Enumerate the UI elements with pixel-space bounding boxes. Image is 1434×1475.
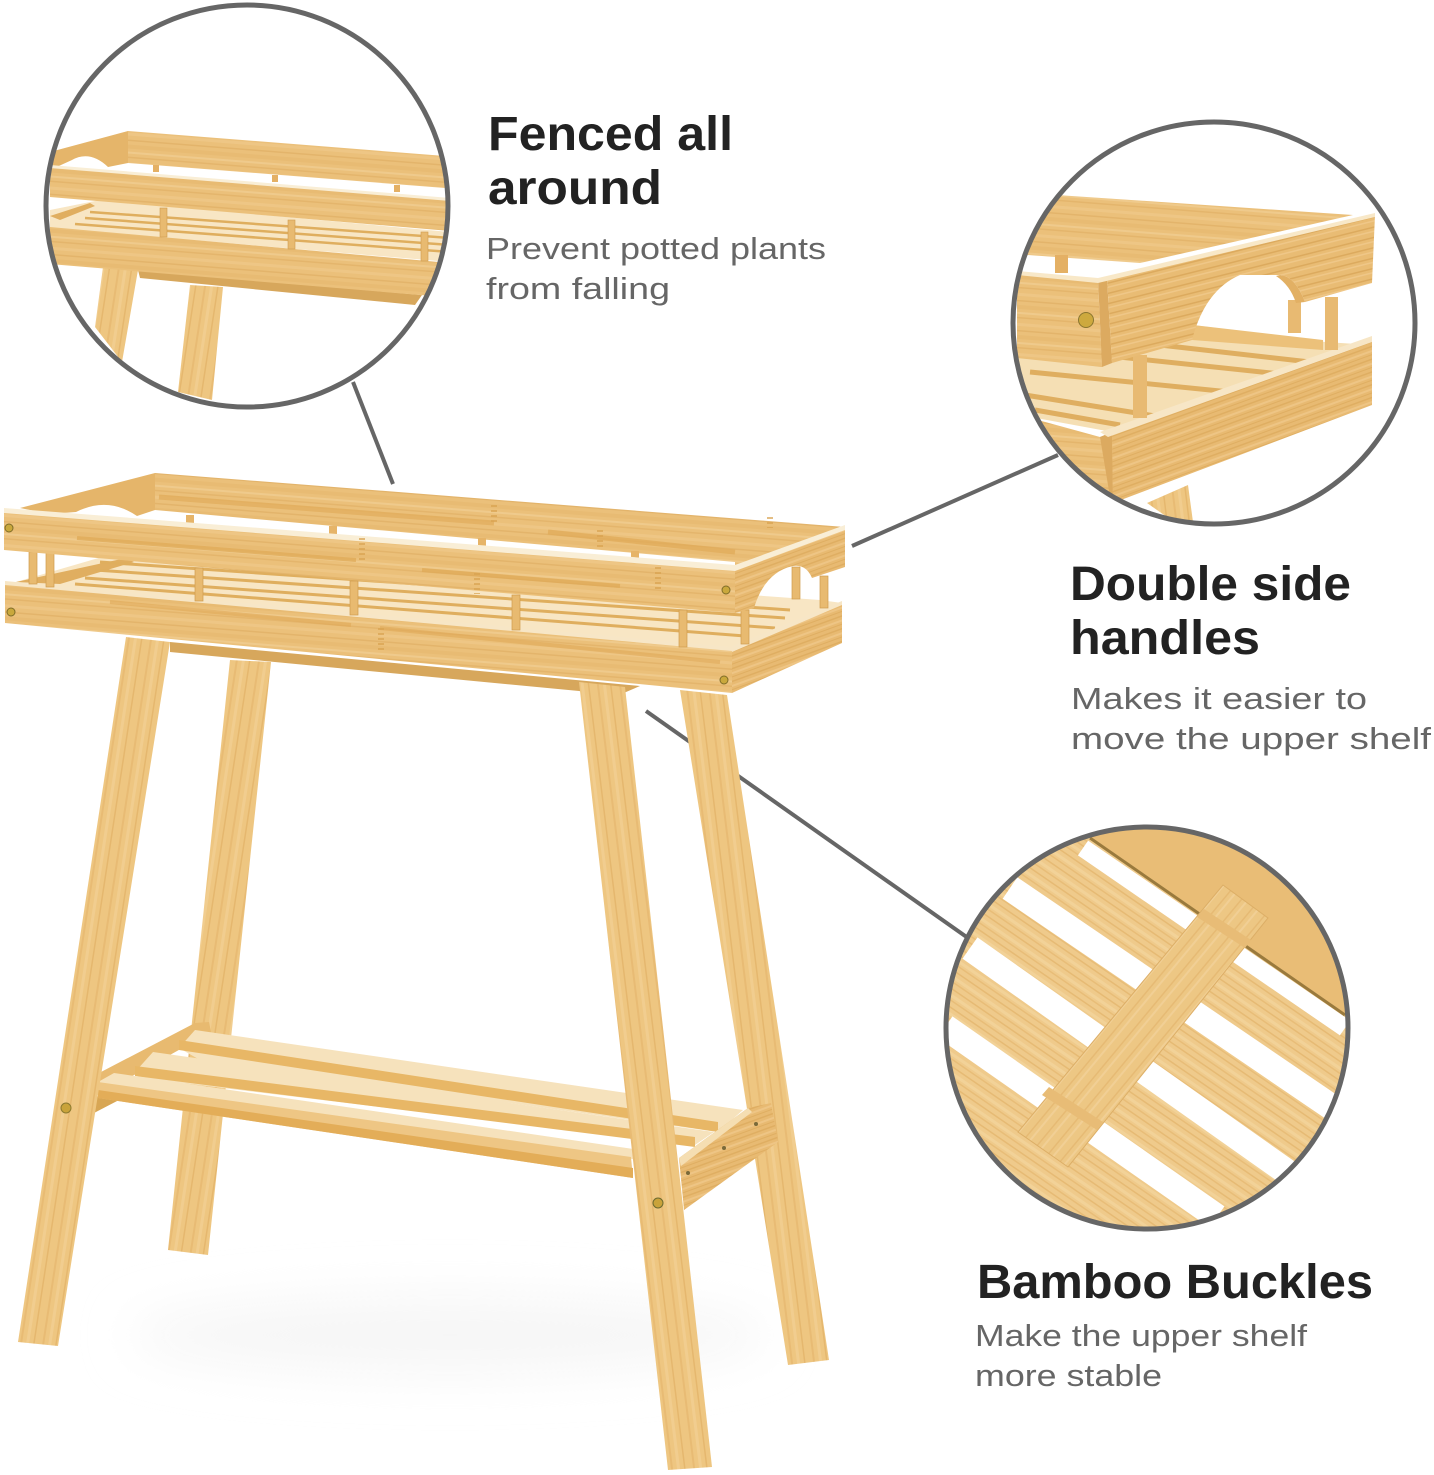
tray upper side rail with handle cut-out	[735, 527, 845, 613]
buckle board	[1018, 885, 1268, 1167]
description: prevent falling: from falling	[486, 271, 670, 306]
detail circle: fenced rail	[46, 5, 450, 407]
tray lower side rail	[732, 603, 842, 693]
detail circle: bamboo buckles	[945, 810, 1360, 1229]
heading line 2: around	[488, 162, 662, 215]
tray lower front rail	[5, 583, 732, 693]
back dowels	[186, 515, 639, 561]
back legs	[168, 660, 829, 1365]
heading: Bamboo Buckles: Bamboo Buckles	[977, 1256, 1373, 1309]
connector line: handle detail	[852, 455, 1058, 546]
heading: Fenced all around: Fenced all	[488, 108, 733, 161]
front dowels	[29, 552, 828, 647]
description: prevent falling	[486, 231, 826, 306]
lower rail streak	[110, 602, 720, 662]
under-tray support bar	[170, 642, 640, 698]
back rail streaks	[159, 497, 735, 552]
tray upper front rail	[4, 510, 735, 613]
description: more stable	[975, 1318, 1307, 1393]
heading line 2: handles	[1070, 612, 1260, 665]
floor shadow	[130, 1297, 770, 1373]
brass screws	[5, 524, 730, 684]
bamboo node marks	[362, 505, 770, 652]
description: more stable: more stable	[975, 1358, 1162, 1393]
front legs	[18, 637, 712, 1470]
detail circle: double side handles	[1010, 122, 1415, 524]
description: easier to move	[1071, 681, 1431, 756]
description: prevent falling: Prevent potted plants	[486, 231, 826, 266]
description: easier to move: Makes it easier to	[1071, 681, 1367, 716]
tray back rail	[155, 473, 845, 568]
lower shelf	[94, 1022, 778, 1210]
tray slatted floor	[5, 550, 842, 650]
white gaps between slats	[945, 848, 1345, 1217]
upper rail streaks	[77, 538, 620, 586]
description: easier to move: move the upper shelf	[1071, 721, 1431, 756]
description: more stable: Make the upper shelf	[975, 1318, 1307, 1353]
heading: Double side handles: Double side	[1070, 558, 1351, 611]
tray left rail	[20, 473, 155, 516]
product: bamboo plant stand	[4, 473, 845, 1470]
connector line: fence detail	[353, 382, 393, 484]
connector line: buckle detail	[646, 711, 968, 938]
